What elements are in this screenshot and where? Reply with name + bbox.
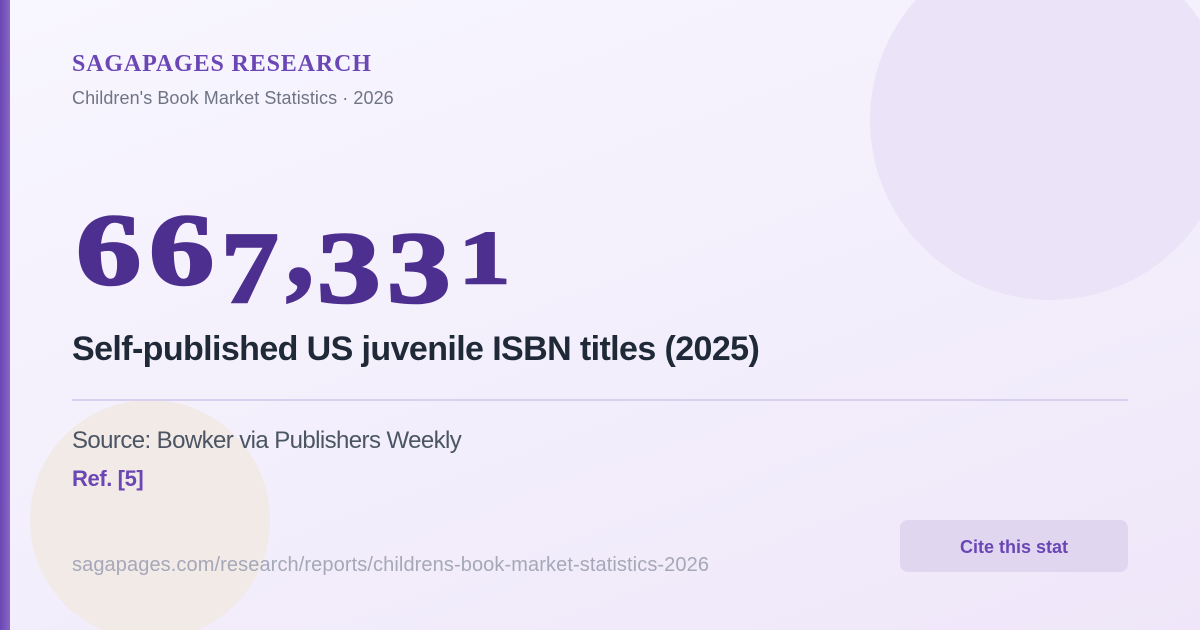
big statistic: 3 bbox=[317, 212, 381, 325]
report subtitle: Children's Book Market Statistics · 2026 bbox=[72, 88, 394, 108]
brand heading: SAGAPAGES RESEARCH bbox=[72, 51, 372, 77]
report url: sagapages.com/research/reports/childrens-book-market-statistics-2026 bbox=[72, 554, 709, 576]
cite button: Cite this stat bbox=[960, 537, 1068, 557]
big statistic: , bbox=[286, 186, 314, 310]
decorative circle: bottom left bbox=[30, 400, 270, 630]
source text: Source: Bowker via Publishers Weekly bbox=[72, 427, 461, 454]
big statistic: 6 bbox=[76, 194, 141, 307]
divider bbox=[72, 399, 1128, 401]
left accent bar bbox=[0, 0, 10, 630]
statistic label: Self-published US juvenile ISBN titles (2025) bbox=[72, 330, 759, 368]
big statistic: 7 bbox=[221, 212, 279, 325]
decorative circle: top right bbox=[870, 0, 1200, 300]
cite button bbox=[900, 520, 1128, 572]
reference tag: Ref. [5] bbox=[72, 466, 143, 491]
big statistic: 6 bbox=[149, 194, 214, 307]
big statistic: 1 bbox=[459, 217, 510, 300]
big statistic bbox=[76, 186, 510, 325]
big statistic: 3 bbox=[387, 212, 451, 325]
